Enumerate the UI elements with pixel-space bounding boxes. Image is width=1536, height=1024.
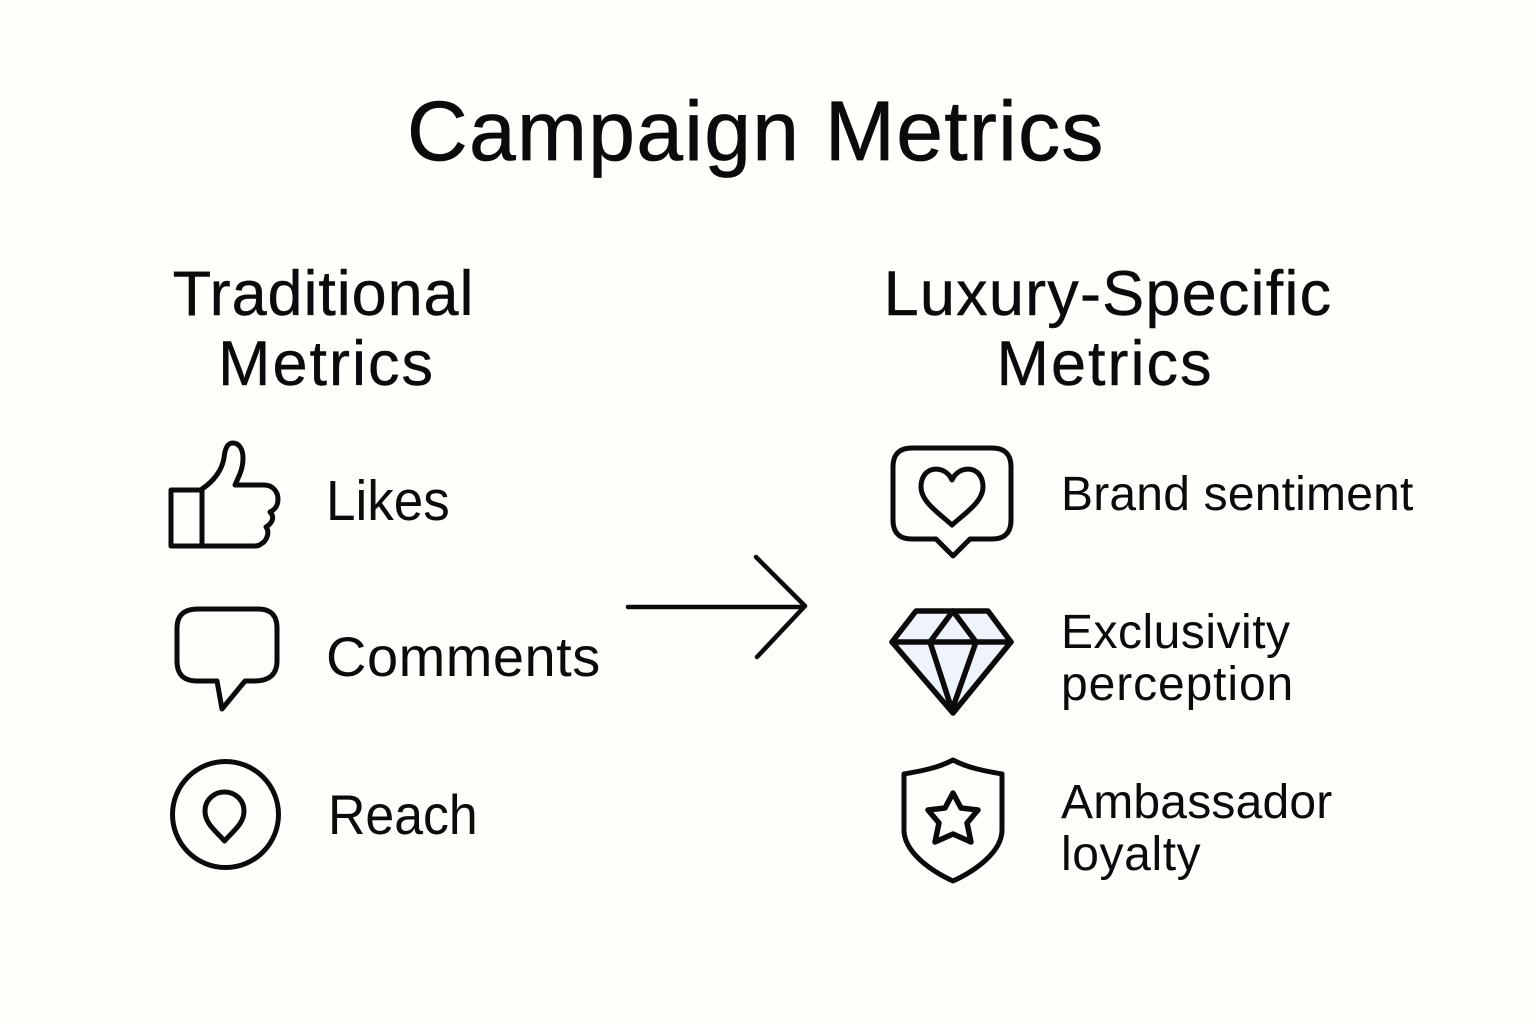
label: brand sentiment: Brand sentiment bbox=[1061, 468, 1414, 521]
label: ambassador loyalty bbox=[1061, 776, 1332, 881]
heading: traditional metrics: Metrics bbox=[218, 329, 435, 399]
icon: thumbs up bbox=[168, 440, 280, 548]
icon: speech bubble bbox=[174, 606, 280, 712]
icon: diamond bbox=[889, 608, 1014, 716]
label: ambassador loyalty: loyalty bbox=[1061, 828, 1201, 881]
label: likes: Likes bbox=[326, 469, 450, 533]
label: comments: Comments bbox=[326, 625, 601, 688]
arrow bbox=[626, 554, 808, 660]
heading: traditional metrics bbox=[173, 259, 474, 399]
label: exclusivity perception: perception bbox=[1061, 658, 1294, 711]
label: exclusivity perception bbox=[1061, 606, 1294, 711]
heading: luxury-specific metrics: Luxury-Specific bbox=[884, 259, 1332, 329]
icon: shield with star bbox=[902, 758, 1004, 884]
label: ambassador loyalty: Ambassador bbox=[1061, 776, 1332, 829]
heading: luxury-specific metrics bbox=[884, 259, 1332, 399]
heading: luxury-specific metrics: Metrics bbox=[996, 329, 1214, 399]
title: Campaign Metrics bbox=[407, 84, 1105, 178]
heading: traditional metrics: Traditional bbox=[173, 259, 474, 329]
label: exclusivity perception: Exclusivity bbox=[1061, 606, 1291, 659]
icon: heart bubble bbox=[890, 446, 1014, 558]
label: reach: Reach bbox=[328, 783, 478, 846]
icon: reach target bbox=[170, 759, 281, 870]
